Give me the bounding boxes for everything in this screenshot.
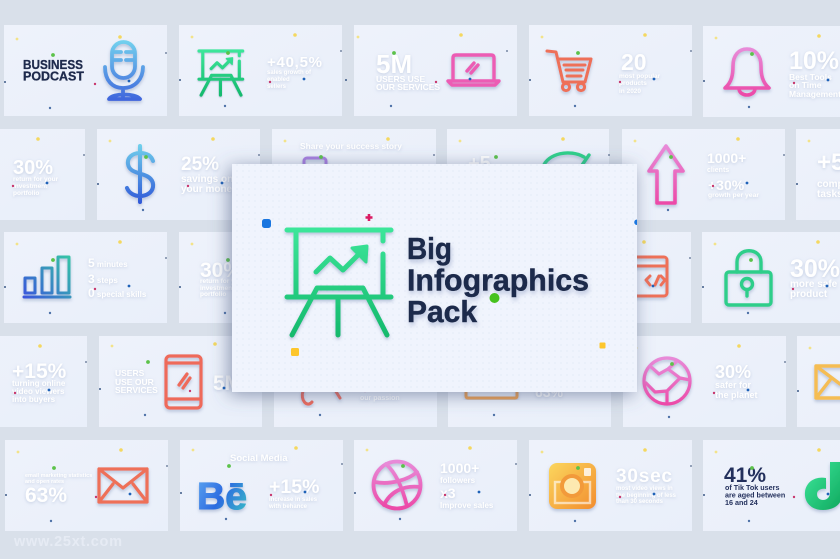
stat: +15%: turning online — [12, 379, 66, 388]
accent: blue square — [262, 219, 271, 228]
icon: green circular arrow — [543, 153, 589, 168]
card: code window — [528, 232, 691, 323]
card: dollar savings — [97, 129, 260, 220]
stat: 20: in 2020 — [619, 88, 641, 95]
stat: 30% more safe: more safe — [790, 279, 838, 290]
title: big infographics pack: Big — [407, 231, 452, 266]
text: users use our services — [115, 368, 158, 395]
text: our passion: our passion — [360, 395, 400, 402]
accent: pink cross — [366, 214, 372, 221]
accent: blue edge dot — [634, 220, 637, 225]
icon: presentation chart large — [287, 230, 391, 335]
stat: 30% return: return for your — [13, 176, 59, 183]
card: arrow up — [622, 129, 785, 220]
heading: social media: Social Media — [230, 453, 288, 464]
stat: 10%: 10% — [789, 47, 839, 75]
icon: purple phone — [304, 158, 326, 188]
stat: 10%: on Time — [789, 80, 822, 90]
title: big infographics pack: Pack — [407, 294, 478, 329]
icon: globe — [644, 358, 690, 404]
stat: 25% savings: your money — [181, 184, 238, 195]
heading: business podcast — [23, 58, 84, 84]
stat: 30% partly hidden: return for your — [200, 278, 246, 285]
stat: +15%: into buyers — [12, 395, 56, 404]
stat: 10% — [789, 47, 840, 99]
stat: 1000+ and 30%: +30% — [708, 177, 745, 193]
heading: business podcast: BUSINESS — [23, 58, 83, 72]
icon: envelope — [99, 469, 147, 502]
heading: business podcast: PODCAST — [23, 70, 84, 84]
icon: dribbble ball — [374, 462, 420, 508]
card: bell — [703, 26, 840, 117]
card: 30% return second — [179, 232, 342, 323]
icon: instagram logo — [549, 463, 596, 509]
stat: 41% tik tok users: 41% — [724, 464, 766, 487]
stat: 1000+ followers: 1000+ — [440, 460, 479, 476]
icon: behance logo: Bē — [197, 476, 247, 518]
stat: 1000+ followers: x3 — [440, 485, 456, 501]
card: instagram 30sec — [529, 440, 692, 531]
icon: dollar sign — [127, 146, 153, 202]
accent: yellow square right — [600, 342, 606, 348]
stat: 10%: Best Tools — [789, 72, 832, 82]
stat: 41% tik tok users: of Tik Tok users — [725, 483, 779, 492]
icon: laptop — [448, 55, 499, 85]
stat: 63% — [25, 473, 92, 507]
card: lock — [702, 232, 840, 323]
stat: 30% return — [13, 157, 59, 197]
watermark: www.25xt.com — [13, 534, 122, 550]
card: +5 completed tasks — [796, 129, 840, 220]
stat: +40,5%: enabled — [267, 77, 290, 83]
stat: 1000+ and 30%: 1000+ — [707, 150, 746, 166]
text: users use our services: SERVICES — [115, 385, 158, 395]
stat: 63%: 63% — [535, 384, 564, 400]
stat: 30% partly hidden: investment — [200, 285, 235, 292]
icon: orange base — [466, 391, 517, 398]
stat: 30% safer: safer for — [715, 380, 752, 390]
stat: +15%: video viewers — [12, 387, 65, 396]
stat: +5: +5 — [468, 153, 491, 175]
stat: 63%: 63% — [25, 484, 67, 507]
stat: 5M partly hidden: 5M — [213, 372, 242, 395]
stat: 1000+ followers: Improve sales — [440, 501, 494, 510]
icon: microphone — [105, 42, 143, 99]
stat: 30% safer: the planet — [715, 390, 758, 400]
card: success story — [272, 129, 436, 220]
accent: yellow square left — [291, 348, 299, 356]
card: 5M users — [345, 25, 517, 116]
card: +40,5% — [179, 25, 342, 116]
icon: shopping cart — [547, 51, 591, 91]
stat: 30% more safe — [790, 255, 840, 300]
stat: 30% partly hidden: 30% — [200, 259, 242, 282]
stat: 20: products — [619, 80, 647, 87]
stat: 25% savings: 25% — [181, 154, 219, 175]
stat: +15%: +15% — [269, 476, 319, 498]
icon: tik tok note — [805, 462, 840, 510]
stat: 20 — [619, 49, 661, 95]
stat: 1000+ and 30% — [707, 150, 759, 199]
stat: 41% tik tok users — [724, 464, 785, 507]
stat list: minutes, steps, skills: 3 steps — [88, 272, 118, 286]
stat: 30sec: most video views in — [616, 486, 673, 492]
stat: 30% more safe: product — [790, 289, 828, 300]
card: yellow envelope — [797, 336, 840, 427]
stat: 41% tik tok users: 16 and 24 — [725, 498, 758, 507]
accent: green dot — [490, 293, 500, 303]
stat: 30sec: the beginning of less — [616, 493, 677, 499]
card: 30% return — [0, 129, 85, 220]
stat list: minutes, steps, skills: 0 special skills — [88, 286, 147, 300]
stat: 20: 20 — [621, 49, 647, 75]
text: users use our services: USERS — [115, 368, 145, 378]
stat: +15%: +15% — [12, 360, 67, 383]
card: tik tok — [703, 440, 840, 531]
stat: 30% partly hidden: portfolio — [200, 291, 226, 298]
stat: 1000+ followers — [440, 460, 494, 510]
stat: 30% more safe: 30% — [790, 255, 840, 283]
icon: yellow envelope — [816, 366, 840, 398]
icon: up arrow — [649, 146, 683, 203]
stat: 30% return: portfolio — [13, 190, 39, 197]
stat: +15%: increase in sales — [269, 497, 318, 503]
stat: +40,5%: sales growth of — [267, 70, 312, 76]
stat: 1000+ and 30%: clients — [707, 167, 729, 174]
card: shopping cart — [529, 25, 692, 116]
icon: bar chart — [24, 257, 70, 297]
stat: 20: most popular — [619, 73, 661, 80]
stat: 25% savings — [181, 154, 238, 195]
card: orange icon — [448, 336, 611, 427]
stat: 30% safer: 30% — [715, 362, 751, 382]
card: 63% envelope — [5, 440, 168, 531]
stat list: minutes, steps, skills: 5 minutes — [88, 256, 128, 270]
stat: 5M users: 5M — [376, 49, 412, 79]
icon: code window — [620, 257, 667, 296]
stat: 30% partly hidden — [200, 259, 246, 298]
icon: presentation chart — [199, 51, 243, 95]
title: big infographics pack: Infographics — [407, 262, 589, 298]
stat: 63%: email marketing statistics — [25, 473, 92, 479]
icon: bell — [725, 49, 769, 95]
stat: +15% — [12, 360, 67, 404]
stat: 63%: and open rates — [25, 479, 64, 485]
stat: 5M users: USERS USE — [376, 74, 425, 84]
stat: 41% tik tok users: are aged between — [725, 490, 785, 500]
stat: 30% return: 30% — [13, 157, 53, 179]
stat: 25% savings: savings on — [181, 174, 233, 185]
card: bar chart — [4, 232, 167, 323]
stat: 5M users — [376, 49, 440, 92]
stat: 30sec: 30sec — [616, 466, 672, 487]
stat: +40,5% — [267, 54, 322, 90]
stat: 1000+ and 30%: growth per year — [708, 192, 759, 199]
card: globe — [623, 336, 786, 427]
stat: 5M users: OUR SERVICES — [376, 82, 440, 92]
stat: +40,5%: sellers — [267, 84, 287, 90]
stat: +15%: with behance — [268, 504, 308, 510]
card: paper clip — [274, 336, 437, 427]
card: phone users — [99, 336, 262, 427]
card: social media behance — [180, 440, 343, 531]
icon: padlock — [726, 251, 771, 305]
icon: smartphone — [166, 356, 201, 408]
main panel: big infographics pack — [232, 164, 637, 392]
stat list: minutes, steps, skills — [88, 256, 147, 300]
card: +15% video viewers — [0, 336, 87, 427]
stat: +40,5%: +40,5% — [267, 54, 322, 71]
stat: 10%: Management — [789, 89, 840, 99]
text: users use our services: USE OUR — [115, 377, 154, 387]
stat: +5 completed — [817, 149, 840, 200]
title: big infographics pack — [407, 231, 589, 329]
stat: +15% — [268, 476, 319, 510]
card: dribbble followers — [354, 440, 517, 531]
card: +5 green — [447, 129, 610, 220]
card: business podcast — [4, 25, 167, 116]
stat: 30% safer — [715, 362, 758, 400]
heading: share your success story: Share your success story — [300, 141, 402, 151]
icon: clip — [302, 390, 340, 404]
stat: 1000+ followers: followers — [440, 476, 476, 485]
stat: 30sec: than 30 seconds — [616, 499, 664, 505]
stat: 30sec — [616, 466, 677, 505]
stat: 30% return: investment — [13, 183, 48, 190]
